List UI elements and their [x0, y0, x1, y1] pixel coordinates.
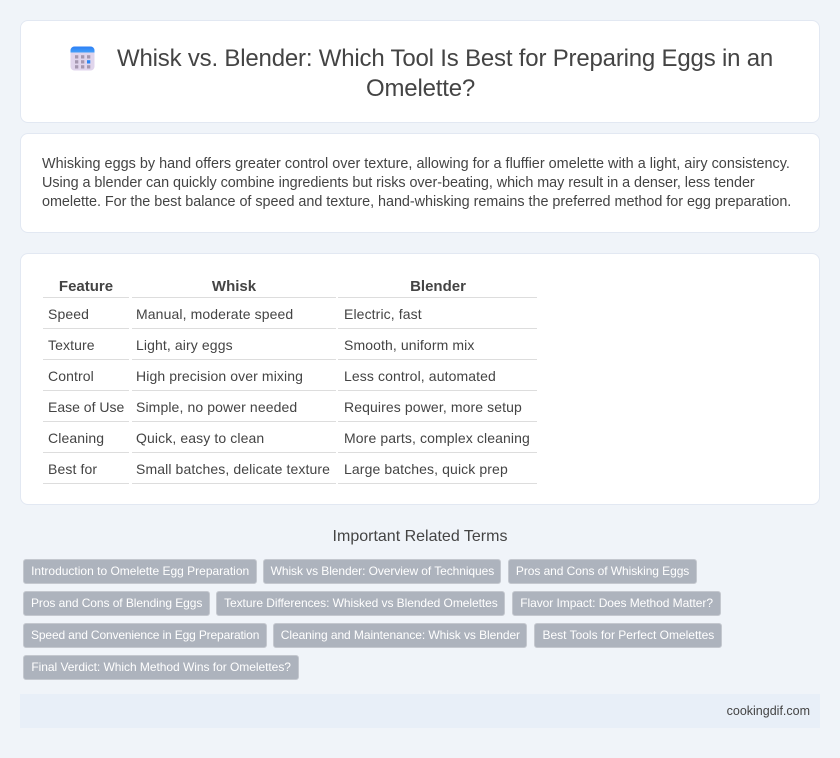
- row: ease of use: [48, 399, 522, 415]
- row: texture: [48, 337, 474, 353]
- tag: Texture Differences: Whisked vs Blended Omelettes: [224, 596, 498, 610]
- footer: [20, 694, 820, 728]
- row: cleaning: More parts, complex cleaning: [344, 430, 530, 446]
- tag: Speed and Convenience in Egg Preparation: [31, 628, 259, 642]
- table header: [59, 278, 466, 295]
- tag: [534, 623, 722, 648]
- row: control: Control: [48, 368, 94, 384]
- row: speed: [48, 306, 422, 322]
- tag: Flavor Impact: Does Method Matter?: [520, 596, 713, 610]
- tag: [23, 623, 267, 648]
- table header: Whisk: [212, 278, 256, 295]
- row: cleaning: [48, 430, 530, 446]
- tag: [23, 591, 210, 616]
- tag: [23, 655, 299, 680]
- source credit: cookingdif.com: [727, 704, 810, 718]
- row: control: Less control, automated: [344, 368, 496, 384]
- row: control: High precision over mixing: [136, 368, 303, 384]
- row: ease of use: Requires power, more setup: [344, 399, 522, 415]
- panel: comparison table: [20, 253, 820, 505]
- table header: Feature: [59, 278, 113, 295]
- panel: intro text: Whisking eggs by hand offers greater control over texture, allowing for a fluffier omelette with a light, airy consistency.: [42, 156, 790, 172]
- tag: [508, 559, 697, 584]
- tag: [23, 559, 257, 584]
- row: texture: Texture: [48, 337, 95, 353]
- row: texture: Light, airy eggs: [136, 337, 233, 353]
- title: Whisk vs. Blender: Which Tool Is Best for Preparing Eggs in an: [117, 45, 773, 72]
- row: speed: Electric, fast: [344, 306, 422, 322]
- tag: Whisk vs Blender: Overview of Techniques: [271, 564, 494, 578]
- row: best for: [48, 461, 508, 477]
- title: [117, 45, 773, 102]
- tag: [512, 591, 721, 616]
- row: cleaning: Cleaning: [48, 430, 104, 446]
- panel: intro text: omelette. For the best balance of speed and texture, hand-whisking remains the preferred method for egg preparation.: [42, 194, 791, 210]
- row: speed: Manual, moderate speed: [136, 306, 293, 322]
- tag list: [23, 559, 722, 680]
- tag: Cleaning and Maintenance: Whisk vs Blender: [281, 628, 520, 642]
- tag: Final Verdict: Which Method Wins for Omelettes?: [31, 660, 291, 674]
- panel: intro text: [20, 133, 820, 233]
- row: speed: Speed: [48, 306, 89, 322]
- tag: Pros and Cons of Whisking Eggs: [516, 564, 689, 578]
- row: control: [48, 368, 496, 384]
- tag: Best Tools for Perfect Omelettes: [542, 628, 714, 642]
- row: best for: Small batches, delicate texture: [136, 461, 330, 477]
- tag: [216, 591, 505, 616]
- heading: related terms: Important Related Terms: [333, 528, 507, 545]
- icon: calendar: [70, 46, 94, 70]
- row: ease of use: Ease of Use: [48, 399, 124, 415]
- row: ease of use: Simple, no power needed: [136, 399, 297, 415]
- tag: Introduction to Omelette Egg Preparation: [31, 564, 249, 578]
- panel: header: [20, 20, 820, 123]
- title: Omelette?: [366, 75, 475, 102]
- row: best for: Large batches, quick prep: [344, 461, 508, 477]
- row: texture: Smooth, uniform mix: [344, 337, 474, 353]
- row: best for: Best for: [48, 461, 97, 477]
- tag: [273, 623, 527, 648]
- tag: Pros and Cons of Blending Eggs: [31, 596, 202, 610]
- tag: [263, 559, 501, 584]
- table header: Blender: [410, 278, 466, 295]
- row: cleaning: Quick, easy to clean: [136, 430, 264, 446]
- panel: intro text: Using a blender can quickly combine ingredients but risks over-beating, which may result in a denser, less tender: [42, 174, 755, 190]
